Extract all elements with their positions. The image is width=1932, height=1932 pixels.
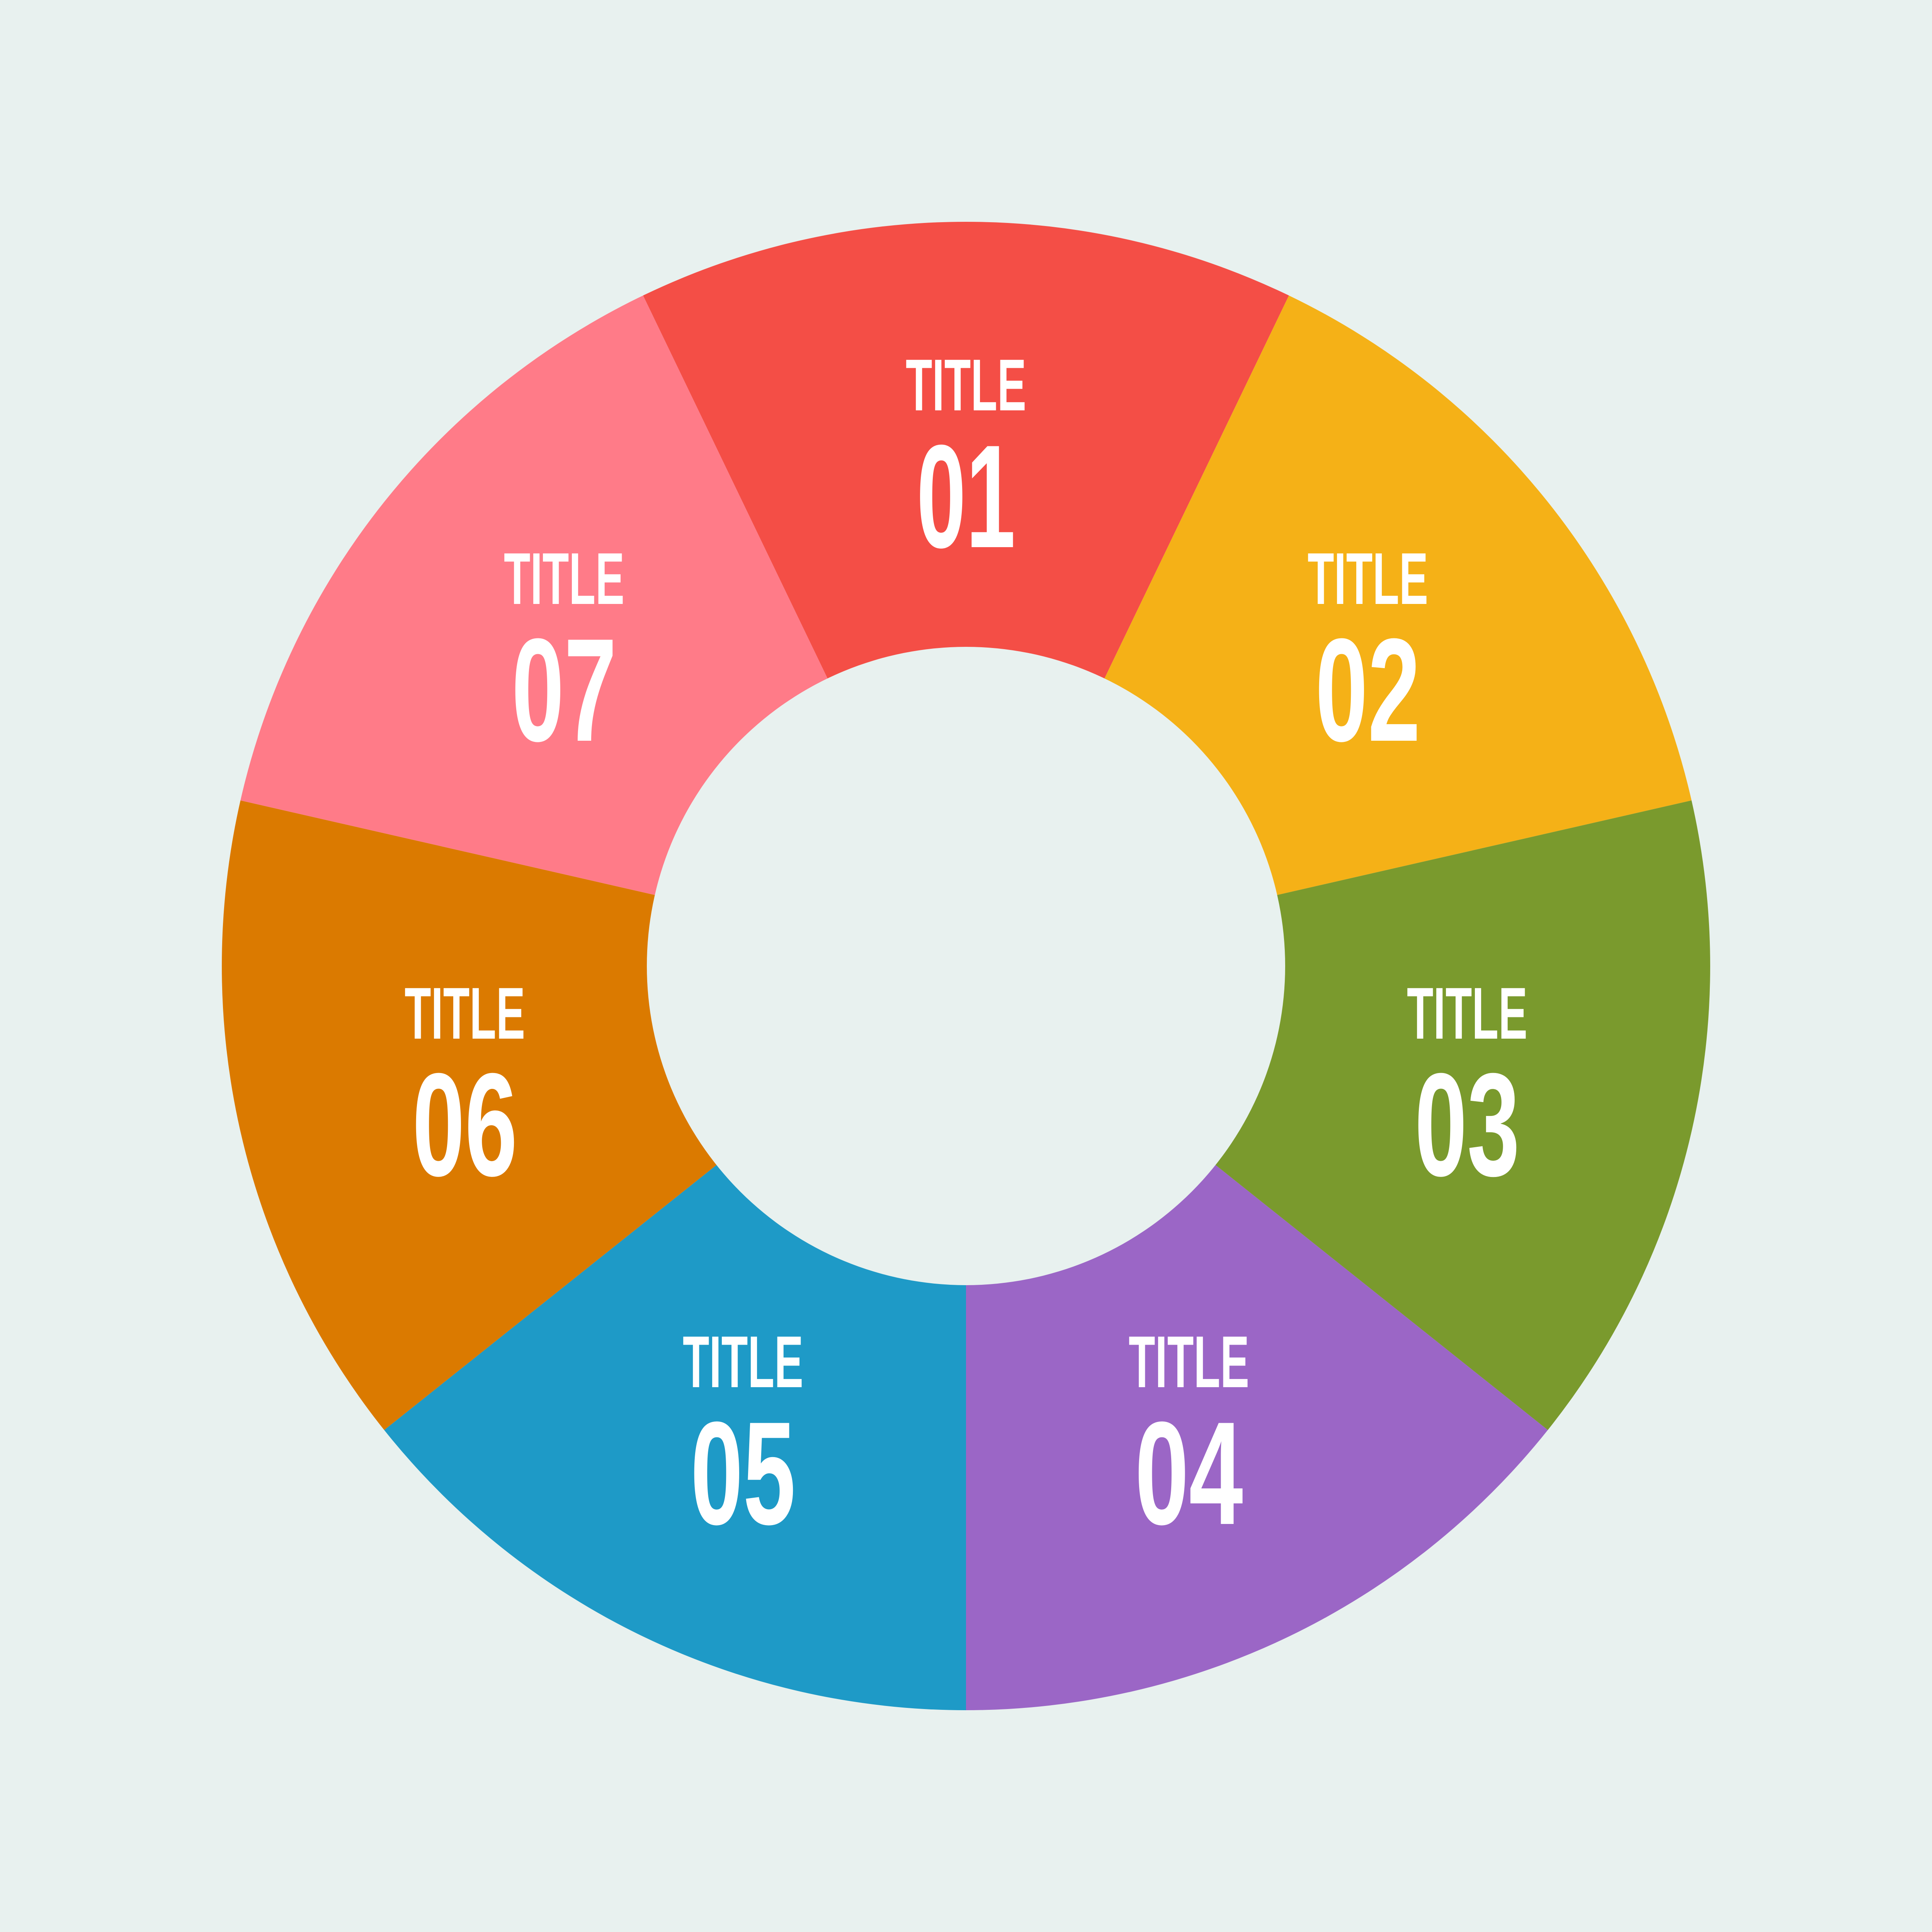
inner hole [647, 647, 1285, 1285]
label 02: 02 [1315, 608, 1420, 772]
label 07: 07 [512, 608, 617, 772]
label 05: TITLE [683, 1321, 803, 1403]
label 06: 06 [412, 1043, 517, 1207]
segment 04 [966, 966, 1548, 1710]
label 06 [405, 973, 525, 1207]
label 04: TITLE [1129, 1321, 1249, 1403]
label 05: 05 [690, 1391, 796, 1555]
label 03 [1407, 973, 1527, 1207]
label 06: TITLE [405, 973, 525, 1054]
label 03: TITLE [1407, 973, 1527, 1054]
label 02 [1308, 538, 1428, 772]
label 07: TITLE [504, 538, 624, 620]
label 01: 01 [917, 414, 1015, 578]
segment 05 [384, 966, 966, 1710]
label 04: 04 [1135, 1391, 1244, 1555]
label 04 [1129, 1321, 1249, 1555]
label 01 [906, 344, 1026, 578]
segment 07 [240, 296, 966, 966]
label 01: TITLE [906, 344, 1026, 426]
segment 06 [222, 801, 966, 1430]
label 05 [683, 1321, 803, 1555]
label 07 [504, 538, 624, 772]
ring chart [222, 222, 1710, 1710]
segment 03 [966, 801, 1710, 1430]
segment 01 [643, 222, 1289, 966]
label 02: TITLE [1308, 538, 1428, 620]
segment 02 [966, 296, 1692, 966]
label 03: 03 [1415, 1043, 1520, 1207]
